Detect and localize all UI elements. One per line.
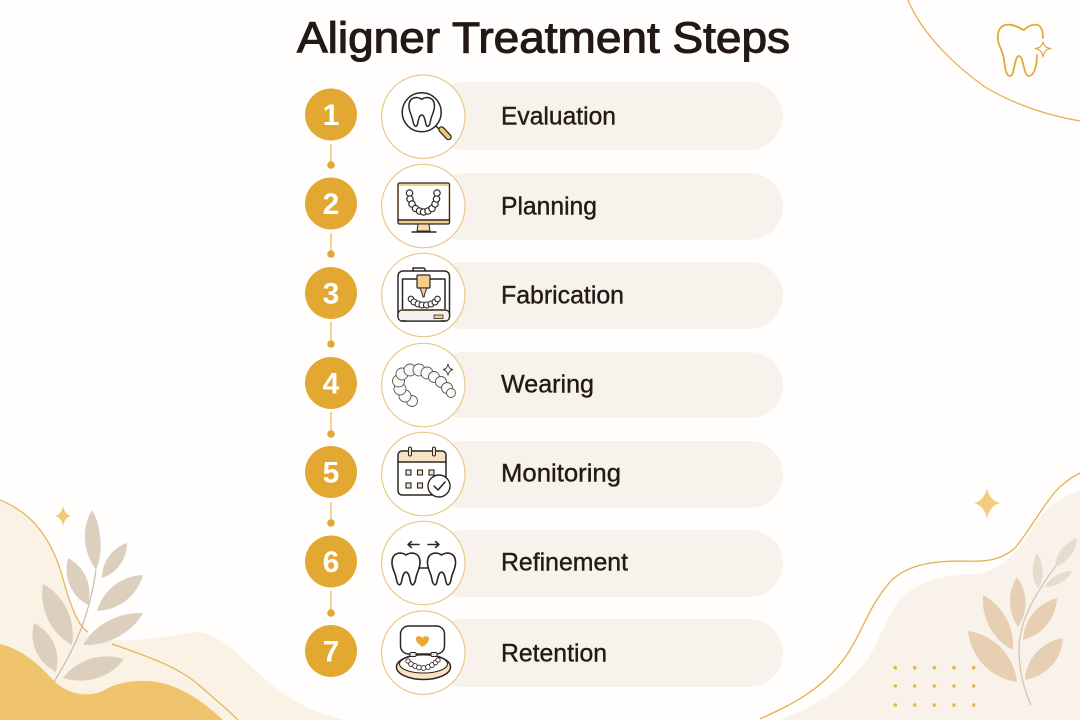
number badge 4 [305, 357, 357, 409]
icon: tooth with sparkle [998, 25, 1051, 76]
number badge 5 [305, 446, 357, 498]
icon: left leaf branch [33, 510, 143, 682]
number badge 7: 7 [323, 636, 339, 668]
icon circle 6: teeth spacing [382, 521, 465, 605]
step 4: Wearing [305, 343, 594, 427]
icon: right leaf branch [968, 538, 1077, 705]
number badge 2: 2 [323, 188, 339, 221]
icon: right sparkle [974, 488, 1000, 519]
icon circle 4: clear aligner [382, 343, 465, 427]
label 3: Fabrication [501, 282, 624, 310]
number badge 1 [305, 88, 357, 140]
number badge 2 [305, 178, 357, 230]
label 5: Monitoring [501, 460, 621, 488]
number badge 6: 6 [323, 546, 339, 579]
step 1: Evaluation [305, 75, 616, 158]
dot grid [894, 666, 976, 707]
decoration: bottom-left waves [0, 500, 345, 720]
label 4: Wearing [501, 370, 594, 398]
number badge 1: 1 [323, 99, 339, 132]
timeline connectors [327, 144, 335, 617]
icon circle 3: 3D printer [382, 253, 465, 337]
step 5: Monitoring [305, 432, 621, 516]
step 3: Fabrication [305, 253, 624, 337]
icon: left sparkle [55, 506, 71, 526]
icon circle 1: tooth under magnifier [382, 75, 465, 158]
pills [430, 82, 783, 687]
number badge 7 [305, 625, 357, 677]
decoration: bottom-right waves [760, 473, 1080, 720]
step 7: Retention [305, 611, 607, 694]
label 2: Planning [501, 192, 597, 220]
number badge 4: 4 [323, 368, 340, 400]
label 7: Retention [501, 640, 607, 668]
icon circle 5: calendar with check [382, 432, 465, 516]
title: Aligner Treatment Steps [297, 14, 790, 62]
icon circle 2: monitor with dental arch [382, 164, 465, 248]
number badge 3: 3 [323, 278, 339, 310]
number badge 3 [305, 267, 357, 319]
number badge 5: 5 [323, 456, 339, 490]
label 1: Evaluation [501, 102, 616, 130]
decoration: top-right curve [908, 0, 1080, 121]
icon circle 7: retainer case [382, 611, 465, 694]
step 6: Refinement [305, 521, 628, 605]
step 2: Planning [305, 164, 597, 248]
label 6: Refinement [501, 548, 628, 576]
number badge 6 [305, 536, 357, 588]
